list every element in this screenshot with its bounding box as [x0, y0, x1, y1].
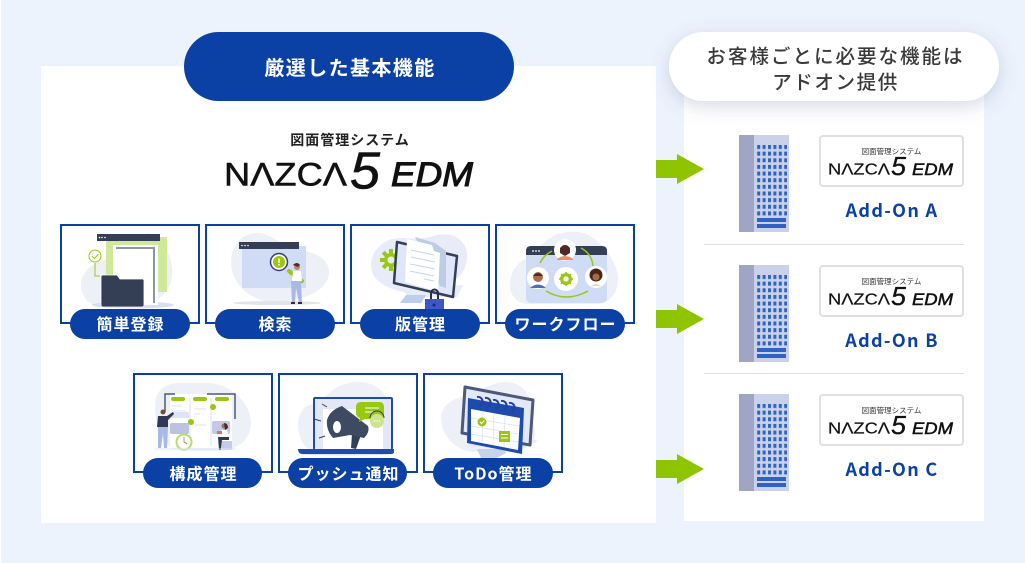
main logo: NAZCA5 EDM: 5 — [350, 142, 381, 200]
panel: add-ons — [669, 32, 999, 521]
main logo: NAZCA5 EDM: NΛZCΛ — [224, 156, 348, 192]
logo box: EDM — [912, 290, 954, 309]
card: version management — [351, 225, 489, 339]
icon: workflow people — [510, 232, 618, 304]
arrow to add-on A — [656, 154, 704, 184]
logo box: 図面管理システム — [862, 146, 921, 157]
pill label: 版管理 — [395, 311, 446, 335]
heading pill: add-ons: お客様ごとに必要な機能は — [706, 40, 965, 69]
logo box: NΛZCΛ — [828, 162, 890, 178]
arrow to add-on B — [656, 304, 704, 334]
logo box: EDM — [912, 160, 954, 179]
pill label: 簡単登録 — [96, 311, 165, 335]
icon: magnifier and person — [231, 233, 329, 305]
icon: building — [739, 394, 789, 491]
icon: building — [739, 265, 789, 362]
logo box: 5 — [891, 281, 907, 311]
logo box — [820, 395, 963, 445]
logo box: 5 — [891, 410, 907, 440]
gear — [380, 249, 402, 271]
card: simple registration — [61, 225, 199, 339]
pill label: ワークフロー — [514, 311, 617, 335]
logo box: NΛZCΛ — [828, 420, 890, 438]
pill label: プッシュ通知 — [297, 460, 400, 484]
icon: folder and documents — [81, 233, 174, 308]
card: ToDo management — [424, 374, 562, 488]
pill label: 検索 — [258, 311, 293, 335]
heading pill: basic features — [184, 32, 514, 101]
label: Add-On C — [844, 456, 939, 482]
main logo: NAZCA5 EDM — [224, 130, 474, 200]
heading pill: add-ons — [669, 32, 999, 101]
pill label: 構成管理 — [169, 460, 238, 484]
add-on row A — [739, 135, 963, 232]
add-on row B — [739, 265, 963, 362]
heading pill: basic features: 厳選した基本機能 — [264, 52, 436, 81]
icon: monitor, document and lock — [371, 234, 467, 310]
card: workflow — [496, 225, 634, 339]
logo box: NΛZCΛ — [828, 292, 890, 308]
card: search — [206, 225, 344, 339]
pill label: ToDo管理 — [454, 460, 533, 484]
icon: calendar on monitor — [441, 382, 538, 458]
icon: laptop with megaphone — [298, 382, 394, 456]
heading pill: add-ons: アドオン提供 — [772, 66, 899, 95]
main logo: NAZCA5 EDM: 図面管理システム — [290, 130, 410, 150]
card: configuration management — [134, 374, 272, 488]
logo box — [820, 266, 963, 316]
main logo: NAZCA5 EDM: EDM — [391, 156, 474, 194]
logo box: EDM — [912, 419, 954, 438]
card: push notification — [279, 374, 417, 488]
label: Add-On B — [844, 327, 939, 353]
label: Add-On A — [845, 197, 938, 223]
logo box — [820, 136, 963, 186]
panel: basic features — [41, 32, 656, 523]
logo box: 5 — [891, 151, 907, 181]
add-on row C — [739, 394, 963, 491]
icon: building — [739, 135, 789, 232]
icon: kanban board with people — [155, 383, 251, 451]
logo box: 図面管理システム — [862, 405, 921, 416]
arrow to add-on C — [656, 454, 704, 484]
logo box: 図面管理システム — [862, 276, 921, 287]
